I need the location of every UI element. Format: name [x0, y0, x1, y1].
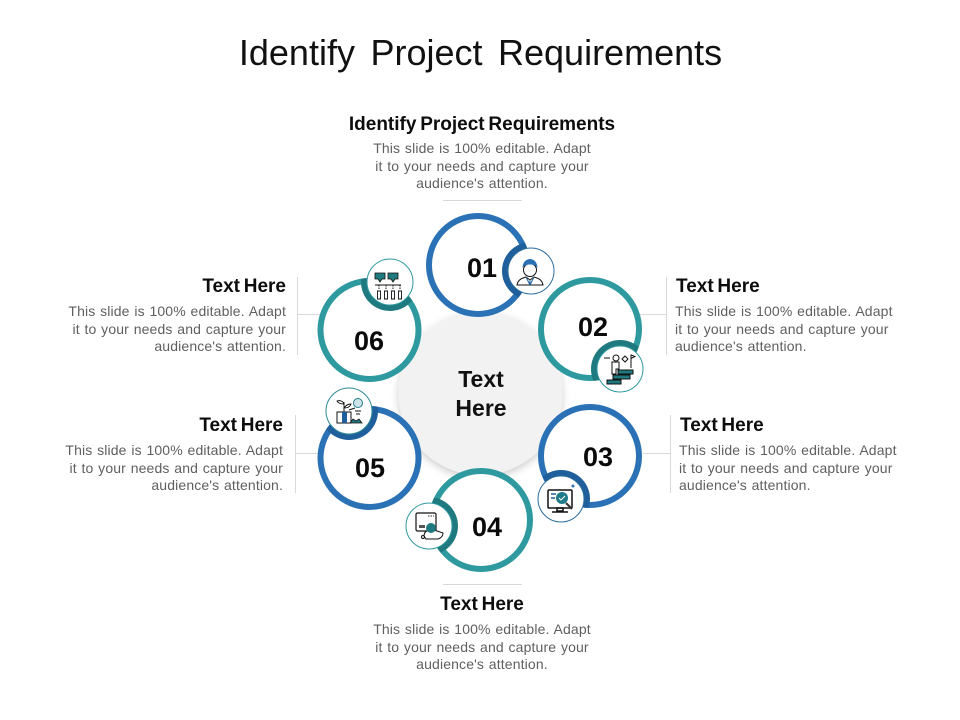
text block: 03	[643, 415, 897, 493]
step 06: 06	[354, 326, 384, 356]
text block: 05: Text Here	[199, 415, 283, 436]
text block: 02	[640, 276, 893, 355]
step 03: 03	[583, 442, 613, 472]
step 05	[320, 382, 418, 507]
icon: stairs	[604, 355, 635, 384]
text block: 02: This slide is 100% editable. Adapt	[675, 303, 893, 319]
step 01: 01	[467, 253, 497, 283]
step 01	[429, 216, 560, 314]
icon: engineer	[517, 259, 543, 285]
text block: 04: Text Here	[440, 594, 524, 615]
step 03	[532, 407, 639, 528]
icon: piggy bank	[416, 513, 443, 539]
step 02: 02	[578, 312, 608, 342]
text block: 02: it to your needs and capture your	[675, 321, 889, 337]
text block: 03: Text Here	[680, 415, 764, 436]
text block: 05: This slide is 100% editable. Adapt	[65, 442, 283, 458]
text block: 03: audience's attention.	[679, 477, 811, 493]
title: Identify Project Requirements	[239, 32, 722, 73]
center circle	[398, 311, 562, 475]
icon: plant and factory	[337, 398, 362, 423]
center circle: Here	[455, 395, 507, 421]
text block: 06: audience's attention.	[154, 338, 286, 354]
text block: top	[349, 114, 615, 200]
text block: 04: it to your needs and capture your	[375, 639, 589, 655]
text block: 03: This slide is 100% editable. Adapt	[679, 442, 897, 458]
text block: 06	[68, 276, 320, 355]
text block: 02: Text Here	[676, 276, 760, 297]
text block: 04	[373, 584, 591, 672]
text block: 06: Text Here	[202, 276, 286, 297]
text block: 03: it to your needs and capture your	[679, 460, 893, 476]
text block: top: This slide is 100% editable. Adapt	[373, 140, 591, 156]
text block: 04: This slide is 100% editable. Adapt	[373, 621, 591, 637]
icon: network nodes	[375, 273, 402, 299]
text block: top: Identify Project Requirements	[349, 114, 615, 135]
text block: 06: This slide is 100% editable. Adapt	[68, 303, 286, 319]
step 04: 04	[472, 512, 502, 542]
text block: 02: audience's attention.	[675, 338, 807, 354]
text block: 05	[65, 415, 318, 493]
center circle: Text	[458, 366, 504, 392]
step 04	[400, 471, 530, 569]
icon: monitor with magnifier	[548, 484, 574, 512]
text block: 05: audience's attention.	[151, 477, 283, 493]
text block: 06: it to your needs and capture your	[72, 321, 286, 337]
text block: 04: audience's attention.	[416, 656, 548, 672]
step 06	[320, 253, 419, 379]
step 02	[541, 280, 649, 398]
text block: top: audience's attention.	[416, 175, 548, 191]
text block: top: it to your needs and capture your	[375, 158, 589, 174]
step 05: 05	[355, 453, 385, 483]
text block: 05: it to your needs and capture your	[69, 460, 283, 476]
